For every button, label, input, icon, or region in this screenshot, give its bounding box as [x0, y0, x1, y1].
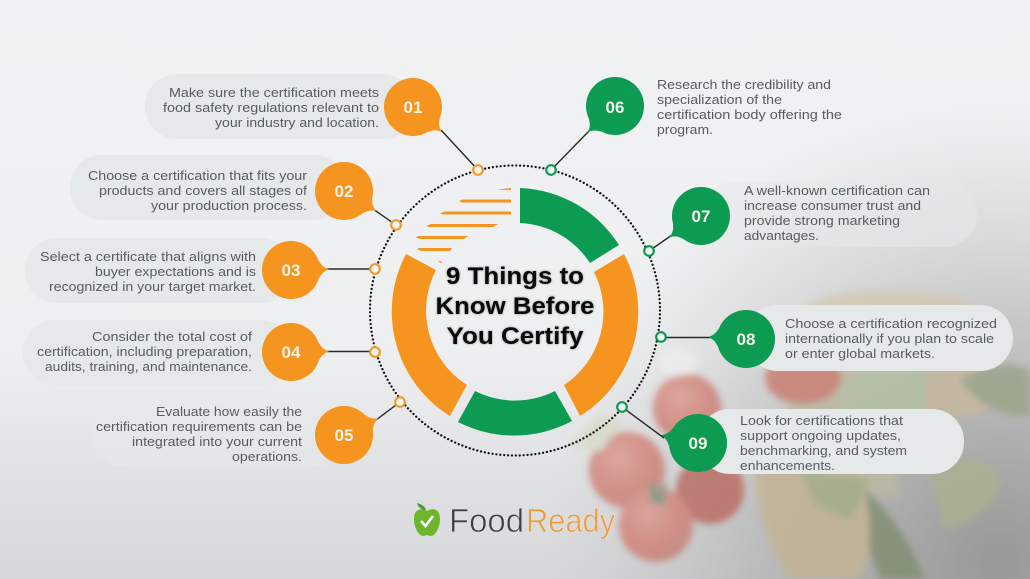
badge	[315, 162, 381, 220]
text: advantages.	[744, 228, 819, 243]
pill	[70, 155, 346, 220]
node	[617, 402, 627, 412]
number: 05	[335, 426, 353, 445]
connector	[441, 130, 478, 170]
number: 02	[335, 182, 353, 201]
node	[370, 347, 380, 357]
node	[473, 165, 483, 175]
node	[546, 165, 556, 175]
segment: green top	[520, 188, 619, 263]
pill	[145, 74, 415, 139]
badge	[384, 78, 448, 139]
segment: orange speed lines	[416, 188, 511, 263]
segment: orange right	[564, 254, 638, 416]
text: integrated into your current	[132, 434, 302, 449]
title: 9 Things to	[446, 263, 584, 290]
connector	[327, 268, 375, 270]
node	[370, 264, 380, 274]
text: provide strong marketing	[744, 213, 900, 228]
item 04	[23, 320, 380, 385]
item 08	[656, 305, 1013, 371]
pill	[92, 403, 346, 467]
text	[96, 404, 302, 464]
text: Choose a certification recognized	[785, 316, 997, 331]
item 01	[145, 74, 483, 175]
title: You Certify	[446, 323, 584, 350]
connector	[373, 209, 396, 225]
number: 08	[737, 330, 755, 349]
text: certification requirements can be	[96, 419, 302, 434]
logo: FoodReady	[414, 502, 615, 539]
pill	[698, 409, 964, 474]
node	[395, 397, 405, 407]
text	[740, 413, 907, 473]
text: Evaluate how easily the	[156, 404, 302, 419]
text: or enter global markets.	[785, 346, 935, 361]
connector	[649, 235, 672, 251]
connector	[622, 407, 664, 438]
text: Make sure the certification meets	[169, 85, 380, 100]
pill	[23, 320, 293, 385]
node	[391, 220, 401, 230]
item 07	[644, 182, 977, 256]
text: Look for certifications that	[740, 413, 903, 428]
text: food safety regulations relevant to	[163, 100, 379, 115]
pill	[25, 238, 293, 303]
number: 06	[606, 98, 624, 117]
segment: orange left	[392, 254, 467, 416]
text	[40, 249, 257, 294]
node	[644, 246, 654, 256]
number: 01	[404, 98, 422, 117]
text	[744, 183, 930, 243]
badge	[664, 187, 730, 245]
badge	[659, 414, 727, 472]
badge	[581, 77, 644, 139]
text: internationally if you plan to scale	[785, 331, 994, 346]
text	[657, 77, 842, 137]
text: support ongoing updates,	[740, 428, 901, 443]
text: Consider the total cost of	[92, 329, 252, 344]
text: recognized in your target market.	[49, 279, 256, 294]
number: 03	[282, 261, 300, 280]
central donut chart	[392, 188, 638, 436]
icon: green apple with check	[414, 503, 440, 536]
number: 04	[282, 343, 301, 362]
text: buyer expectations and is	[95, 264, 257, 279]
pill	[745, 305, 1013, 371]
node	[656, 332, 666, 342]
text: certification body offering the	[657, 107, 842, 122]
item 09	[617, 402, 964, 474]
text: specialization of the	[657, 92, 782, 107]
connector	[661, 336, 712, 338]
connector	[327, 350, 375, 352]
item 06	[546, 77, 842, 175]
title: Know Before	[436, 293, 594, 320]
text: benchmarking, and system	[740, 443, 907, 458]
text: certification, including preparation,	[37, 344, 252, 359]
text: enhancements.	[740, 458, 835, 473]
logo: FoodReady: Ready	[526, 502, 615, 539]
pill	[700, 182, 977, 247]
segment: green bottom	[458, 391, 572, 436]
text: Research the credibility and	[657, 77, 831, 92]
badge	[262, 323, 329, 381]
badge	[262, 241, 329, 299]
text: operations.	[232, 449, 302, 464]
text: audits, training, and maintenance.	[45, 359, 252, 374]
item 02	[70, 155, 401, 230]
text: your industry and location.	[215, 115, 379, 130]
text	[88, 168, 308, 213]
text	[163, 85, 380, 130]
text: products and covers all stages of	[99, 183, 307, 198]
text: program.	[657, 122, 713, 137]
item 05	[92, 397, 405, 467]
text: Select a certificate that aligns with	[40, 249, 256, 264]
text	[37, 329, 252, 374]
wordmark: Food	[449, 502, 524, 539]
title	[436, 263, 594, 350]
number: 07	[692, 207, 710, 226]
text	[785, 316, 997, 361]
badge	[315, 406, 382, 464]
number: 09	[689, 434, 707, 453]
text: Choose a certification that fits your	[88, 168, 308, 183]
text: increase consumer trust and	[744, 198, 921, 213]
dotted ring	[370, 166, 660, 456]
item 03	[25, 238, 380, 303]
badge	[708, 310, 775, 368]
connector	[376, 402, 400, 420]
text: A well-known certification can	[744, 183, 930, 198]
connector	[551, 130, 590, 170]
text: your production process.	[151, 198, 307, 213]
